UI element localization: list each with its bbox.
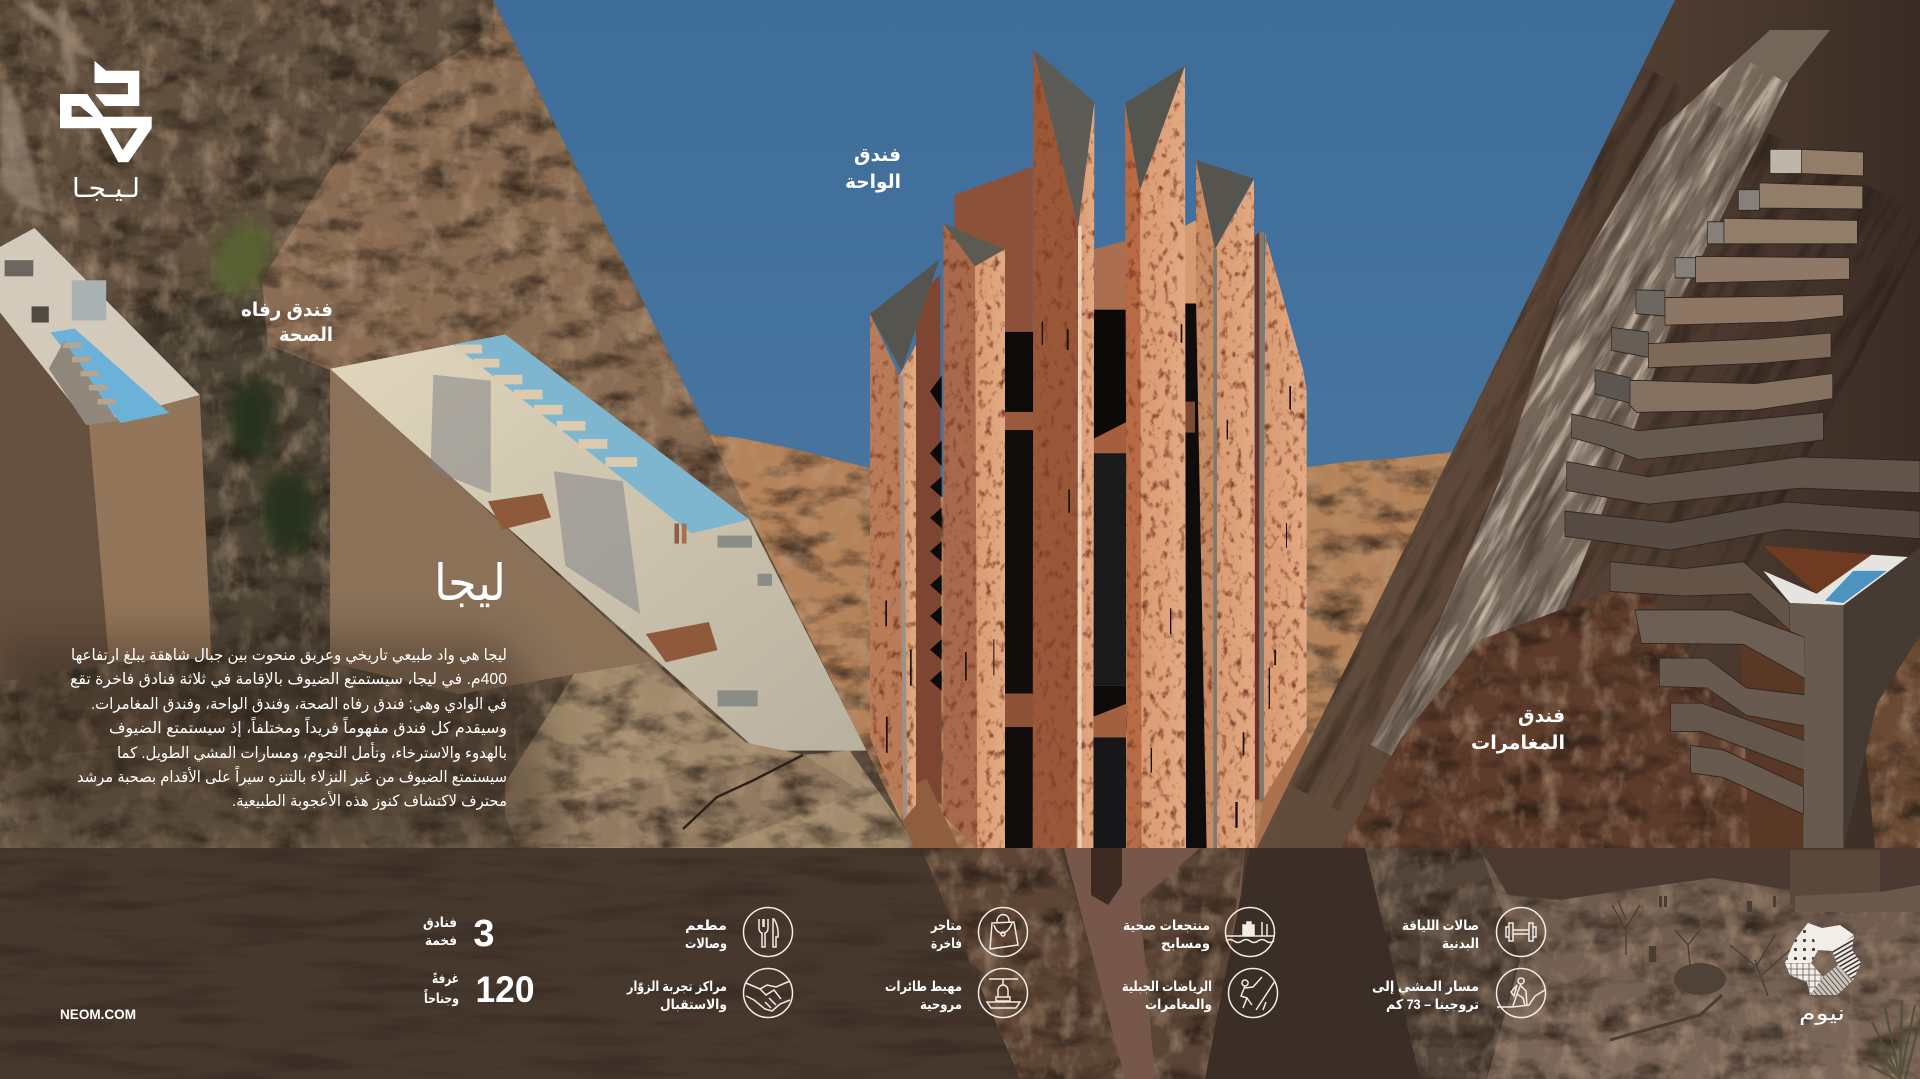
label: gyms	[1402, 918, 1479, 951]
tower fin: right	[1196, 160, 1255, 850]
icon: spa and pool	[1226, 908, 1274, 956]
label: helipad: مروحية	[920, 997, 962, 1012]
tower fin: left	[870, 314, 916, 820]
label: wellness hotel: فندق رفاه	[241, 300, 333, 321]
panel: right adventure hotel scene	[1257, 0, 1920, 848]
logo: NEOM	[1785, 923, 1861, 1025]
icon: helipad	[978, 968, 1028, 1018]
icon: hiker	[1496, 968, 1546, 1018]
label: spas and pools: منتجعات صحية	[1123, 918, 1210, 933]
panel: left wellness hotel scene	[0, 0, 915, 848]
heading: Leja: ليجا	[434, 555, 506, 611]
shade behind description	[0, 640, 560, 850]
large rock	[262, 0, 760, 520]
tower fin: tall centre-left	[1033, 49, 1078, 850]
icon: handshake	[744, 968, 792, 1018]
text block: description: 400م. في ليجا، سيستمتع الضيوف بالإقامة في ثلاثة فنادق فاخرة تقع	[70, 671, 507, 689]
panel: centre sky and oasis hotel	[480, 0, 1690, 860]
label: mountain sports: والمغامرات	[1145, 997, 1212, 1012]
label: hiking trail: تروجينا – 73 كم	[1386, 997, 1479, 1012]
label: adventure hotel: المغامرات	[1471, 733, 1565, 754]
illustration: oasis hotel tower	[900, 167, 1310, 850]
panel: bottom information band	[0, 848, 1920, 1079]
label: hiking trail	[1372, 979, 1479, 1012]
label: oasis hotel	[845, 145, 901, 193]
label: spas and pools: ومسابح	[1161, 936, 1210, 951]
text block: description	[70, 647, 507, 810]
label: restaurants and lounges: مطعم	[685, 918, 727, 933]
label: hiking trail: مسار المشي إلى	[1372, 979, 1479, 994]
tower fin: tall centre-right	[1125, 66, 1186, 850]
tower base rocks	[900, 779, 960, 850]
rusty lower rock	[1340, 580, 1800, 850]
label: visitor centres: والاستقبال	[660, 997, 727, 1012]
label: visitor centres	[626, 979, 727, 1012]
tower fin: second	[943, 223, 1005, 850]
label: wellness hotel	[241, 300, 333, 346]
mountains behind tower	[700, 433, 1452, 860]
label: mountain sports	[1122, 979, 1212, 1012]
text block: description: سيستمتع الضيوف من غير النزلاء بالتنزه سيراً على الأقدام بصحبة مرشد	[77, 766, 507, 787]
label: helipad	[885, 979, 962, 1012]
label: luxury shops: متاجر	[930, 918, 962, 933]
text block: description: ليجا هي واد طبيعي تاريخي وعريق منحوت بين جبال شاهقة يبلغ ارتفاعها	[71, 647, 507, 665]
stat: 3 luxury hotels: فنادق	[423, 915, 457, 930]
logo: NEOM: نيوم	[1799, 1003, 1845, 1025]
sand valley	[1480, 848, 1920, 1079]
logo: Leja	[60, 61, 152, 203]
link: NEOM.COM: NEOM.COM	[60, 1007, 136, 1022]
pale rock streaks	[0, 0, 95, 215]
logo: Leja: لـيـجـا	[72, 173, 140, 203]
label: adventure hotel	[1471, 706, 1565, 754]
text block: description: وسيقدم كل فندق مفهوماً فريداً ومختلفاً، إذ سيستمتع الضيوف	[109, 717, 507, 738]
label: luxury shops	[930, 918, 962, 951]
label: luxury shops: فاخرة	[931, 936, 962, 951]
tower roofs and edges	[870, 49, 1291, 850]
stat: 120 rooms and suites: وجناحاً	[424, 988, 459, 1006]
stat: 120 rooms and suites	[424, 969, 534, 1010]
illustration: tower fins	[870, 49, 1307, 850]
icon: fork and knife	[744, 908, 792, 956]
label: oasis hotel: الواحة	[845, 172, 901, 193]
stat: 3 luxury hotels	[423, 913, 495, 955]
stat: 120 rooms and suites: غرفةً	[432, 971, 459, 986]
illustration: adventure hotel slabs	[1565, 149, 1920, 850]
label: gyms: البدنية	[1442, 936, 1479, 951]
label: oasis hotel: فندق	[854, 145, 901, 166]
valley floor and palms	[125, 222, 330, 756]
label: restaurants and lounges: وصالات	[685, 936, 727, 951]
label: visitor centres: مراكز تجربة الزوّار	[626, 979, 727, 994]
label: wellness hotel: الصحة	[279, 325, 333, 346]
text block: description: في الوادي وهي: فندق رفاه الصحة، وفندق الواحة، وفندق المغامرات.	[91, 696, 507, 714]
text block: description: بالهدوء والاسترخاء، وتأمل النجوم، ومسارات المشي الطويل. كما	[117, 742, 507, 763]
label: gyms: صالات اللياقة	[1402, 918, 1479, 933]
tower fin: far right	[1263, 234, 1307, 799]
label: mountain sports: الرياضات الجبلية	[1122, 979, 1212, 994]
trees, rocks and people	[1610, 900, 1790, 1040]
stat: 3 luxury hotels: فخمة	[425, 933, 457, 948]
label: spas and pools	[1123, 918, 1210, 951]
label: helipad: مهبط طائرات	[885, 979, 962, 994]
label: adventure hotel: فندق	[1518, 706, 1565, 727]
stat: 120 rooms and suites: 120	[476, 969, 534, 1010]
rock strata	[1250, 0, 1915, 833]
label: restaurants and lounges	[685, 918, 727, 951]
stat: 3 luxury hotels: 3	[473, 913, 495, 955]
illustration: small cliff hotel	[0, 228, 211, 682]
icon: climber	[1228, 968, 1278, 1018]
icon: handbag	[978, 908, 1028, 956]
icon: dumbbell	[1496, 908, 1546, 956]
text block: description: محترف لاكتشاف كنوز هذه الأعجوبة الطبيعية.	[232, 791, 507, 810]
illustration: large cliff hotel	[330, 335, 867, 751]
foreground boulders	[0, 662, 915, 848]
